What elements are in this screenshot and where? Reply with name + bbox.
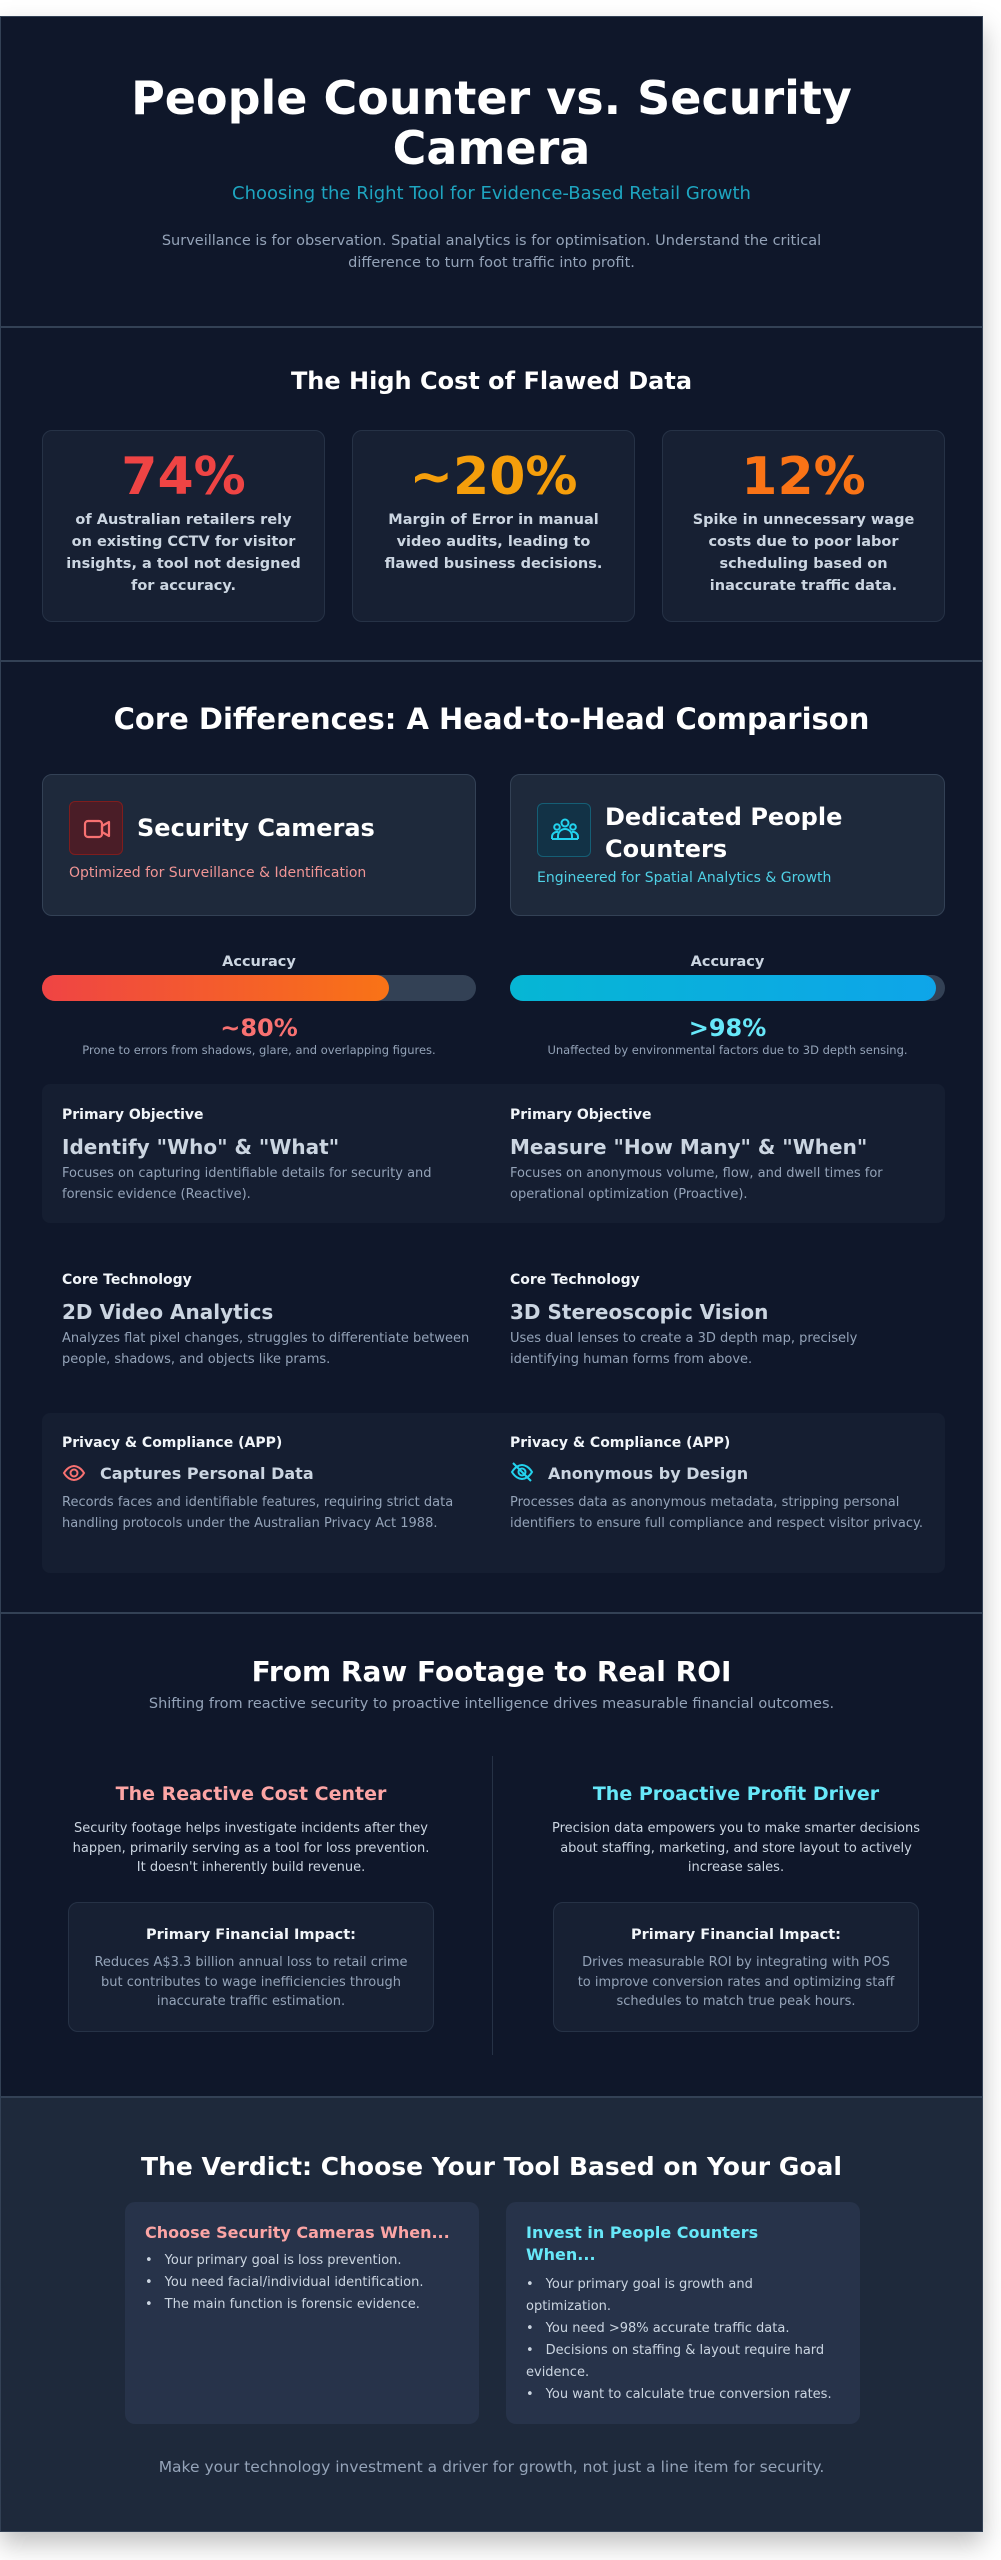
intro text: difference to turn foot traffic into profit. bbox=[348, 255, 635, 271]
accuracy: counters: Accuracy bbox=[691, 954, 764, 970]
header card: people counters: Dedicated People bbox=[605, 803, 842, 831]
column: proactive profit driver bbox=[552, 1783, 920, 2032]
intro text bbox=[162, 233, 821, 271]
icon: camera bbox=[69, 801, 123, 855]
section: raw footage to ROI: The Reactive Cost Center bbox=[116, 1783, 386, 1805]
row: privacy: Anonymous by Design bbox=[548, 1464, 748, 1483]
header section bbox=[1, 17, 982, 328]
accuracy: counters bbox=[510, 954, 945, 1057]
divider line bbox=[492, 1756, 493, 2055]
section: raw footage to ROI: Precision data empowers you to make smarter decisions about staffing, marketing, and store layout to actively increase sales. bbox=[552, 1821, 920, 1875]
card: invest in people counters: You want to calculate true conversion rates. bbox=[546, 2387, 832, 2402]
impact box: Reduces A$3.3 billion annual loss to retail crime but contributes to wage inefficiencies through inaccurate traffic estimation. bbox=[94, 1955, 408, 2009]
row: primary objective: Identify "Who" & "What" bbox=[62, 1135, 339, 1159]
row: primary objective: Focuses on anonymous volume, flow, and dwell times for operational optimization (Proactive). bbox=[510, 1166, 883, 1202]
impact box: Primary Financial Impact: bbox=[146, 1927, 356, 1943]
card: invest in people counters: Decisions on staffing & layout require hard evidence. bbox=[526, 2343, 824, 2380]
section: verdict bbox=[1, 2096, 982, 2531]
row: primary objective: Primary Objective bbox=[510, 1107, 652, 1123]
heading: Core Differences: A Head-to-Head Comparison bbox=[114, 702, 869, 736]
heading: From Raw Footage to Real ROI bbox=[252, 1655, 731, 1688]
card: choose cameras: Your primary goal is loss prevention. bbox=[165, 2253, 402, 2268]
row: core technology: Uses dual lenses to create a 3D depth map, precisely identifying human forms from above. bbox=[510, 1331, 857, 1367]
header card: people counters: Engineered for Spatial Analytics & Growth bbox=[537, 870, 831, 886]
accuracy: counters: >98% bbox=[689, 1014, 766, 1042]
subtitle: Choosing the Right Tool for Evidence-Based Retail Growth bbox=[232, 183, 751, 204]
column: reactive cost center bbox=[68, 1783, 434, 2032]
stat card 74%: 74% bbox=[121, 447, 246, 507]
stat card 20% bbox=[352, 430, 635, 622]
card: invest in people counters: When... bbox=[526, 2245, 596, 2264]
accuracy: cameras: ~80% bbox=[220, 1014, 298, 1042]
stat card 12%: Spike in unnecessary wage costs due to poor labor scheduling based on inaccurate traffic data. bbox=[693, 512, 914, 594]
row: privacy: Captures Personal Data bbox=[100, 1464, 314, 1483]
row: privacy bbox=[42, 1413, 945, 1573]
impact box bbox=[553, 1902, 919, 2032]
impact box: Drives measurable ROI by integrating with POS to improve conversion rates and optimizing staff schedules to match true peak hours. bbox=[578, 1955, 894, 2009]
heading: The High Cost of Flawed Data bbox=[291, 367, 692, 395]
title: Camera bbox=[393, 121, 590, 175]
stat card 20%: Margin of Error in manual video audits, leading to flawed business decisions. bbox=[385, 512, 602, 572]
footer tagline: Make your technology investment a driver for growth, not just a line item for security. bbox=[159, 2458, 824, 2476]
icon: people bbox=[537, 803, 591, 857]
row: core technology: Analyzes flat pixel changes, struggles to differentiate between people, shadows, and objects like prams. bbox=[62, 1331, 469, 1367]
accuracy: counters: Unaffected by environmental factors due to 3D depth sensing. bbox=[547, 1043, 908, 1057]
accuracy: cameras: Prone to errors from shadows, glare, and overlapping figures. bbox=[82, 1043, 436, 1057]
stat card 20%: ~20% bbox=[409, 447, 578, 507]
title: People Counter vs. Security bbox=[131, 71, 852, 125]
accuracy: cameras: Accuracy bbox=[222, 954, 296, 970]
card: invest in people counters: You need >98% accurate traffic data. bbox=[546, 2321, 789, 2336]
row: privacy: Processes data as anonymous metadata, stripping personal identifiers to ensure full compliance and respect visitor privacy. bbox=[510, 1495, 923, 1531]
heading: The Verdict: Choose Your Tool Based on Your Goal bbox=[141, 2152, 842, 2181]
stat card 12% bbox=[662, 430, 945, 622]
row: core technology: Core Technology bbox=[62, 1272, 192, 1288]
row: core technology: Core Technology bbox=[510, 1272, 640, 1288]
stat card 12%: 12% bbox=[741, 447, 866, 507]
card: invest in people counters: Your primary goal is growth and optimization. bbox=[526, 2277, 753, 2314]
header card: security cameras bbox=[42, 774, 476, 916]
header card: people counters bbox=[510, 774, 945, 916]
intro text: Surveillance is for observation. Spatial analytics is for optimisation. Understand the critical bbox=[162, 233, 821, 249]
row: privacy: Privacy & Compliance (APP) bbox=[62, 1435, 282, 1451]
card: choose cameras: Choose Security Cameras When... bbox=[145, 2223, 450, 2242]
accuracy: cameras bbox=[42, 954, 476, 1057]
card: invest in people counters: Invest in People Counters bbox=[526, 2223, 758, 2242]
header card: people counters: Counters bbox=[605, 835, 727, 863]
section: core differences bbox=[1, 662, 982, 1614]
section: high cost of flawed data bbox=[1, 328, 982, 662]
impact box bbox=[68, 1902, 434, 2032]
stat card 74%: of Australian retailers rely on existing CCTV for visitor insights, a tool not designed for accuracy. bbox=[66, 512, 301, 594]
row: privacy: Records faces and identifiable features, requiring strict data handling protocols under the Australian Privacy Act 1988. bbox=[62, 1495, 453, 1531]
section: raw footage to ROI bbox=[68, 1655, 920, 2055]
subtitle: Shifting from reactive security to proactive intelligence drives measurable financial outcomes. bbox=[149, 1696, 834, 1712]
card: choose cameras: The main function is forensic evidence. bbox=[165, 2297, 420, 2312]
card: invest in people counters bbox=[506, 2202, 860, 2424]
row: core technology: 3D Stereoscopic Vision bbox=[510, 1300, 768, 1324]
row: primary objective: Measure "How Many" & "When" bbox=[510, 1135, 867, 1159]
stat card 74% bbox=[42, 430, 325, 622]
title bbox=[131, 71, 852, 175]
card: choose cameras bbox=[125, 2202, 479, 2424]
row: primary objective: Primary Objective bbox=[62, 1107, 204, 1123]
header card: security cameras: Optimized for Surveillance & Identification bbox=[69, 865, 366, 881]
impact box: Primary Financial Impact: bbox=[631, 1927, 841, 1943]
row: primary objective bbox=[42, 1084, 945, 1223]
section: raw footage to ROI: The Proactive Profit Driver bbox=[593, 1783, 879, 1805]
row: core technology: 2D Video Analytics bbox=[62, 1300, 273, 1324]
row: primary objective: Focuses on capturing identifiable details for security and forensic evidence (Reactive). bbox=[62, 1166, 432, 1202]
section: raw footage to ROI: Security footage helps investigate incidents after they happen, primarily serving as a tool for loss prevention. It doesn't inherently build revenue. bbox=[73, 1821, 429, 1875]
row: core technology bbox=[62, 1272, 857, 1367]
header card: security cameras: Security Cameras bbox=[137, 814, 375, 842]
row: privacy: Privacy & Compliance (APP) bbox=[510, 1435, 730, 1451]
card: choose cameras: You need facial/individual identification. bbox=[165, 2275, 423, 2290]
